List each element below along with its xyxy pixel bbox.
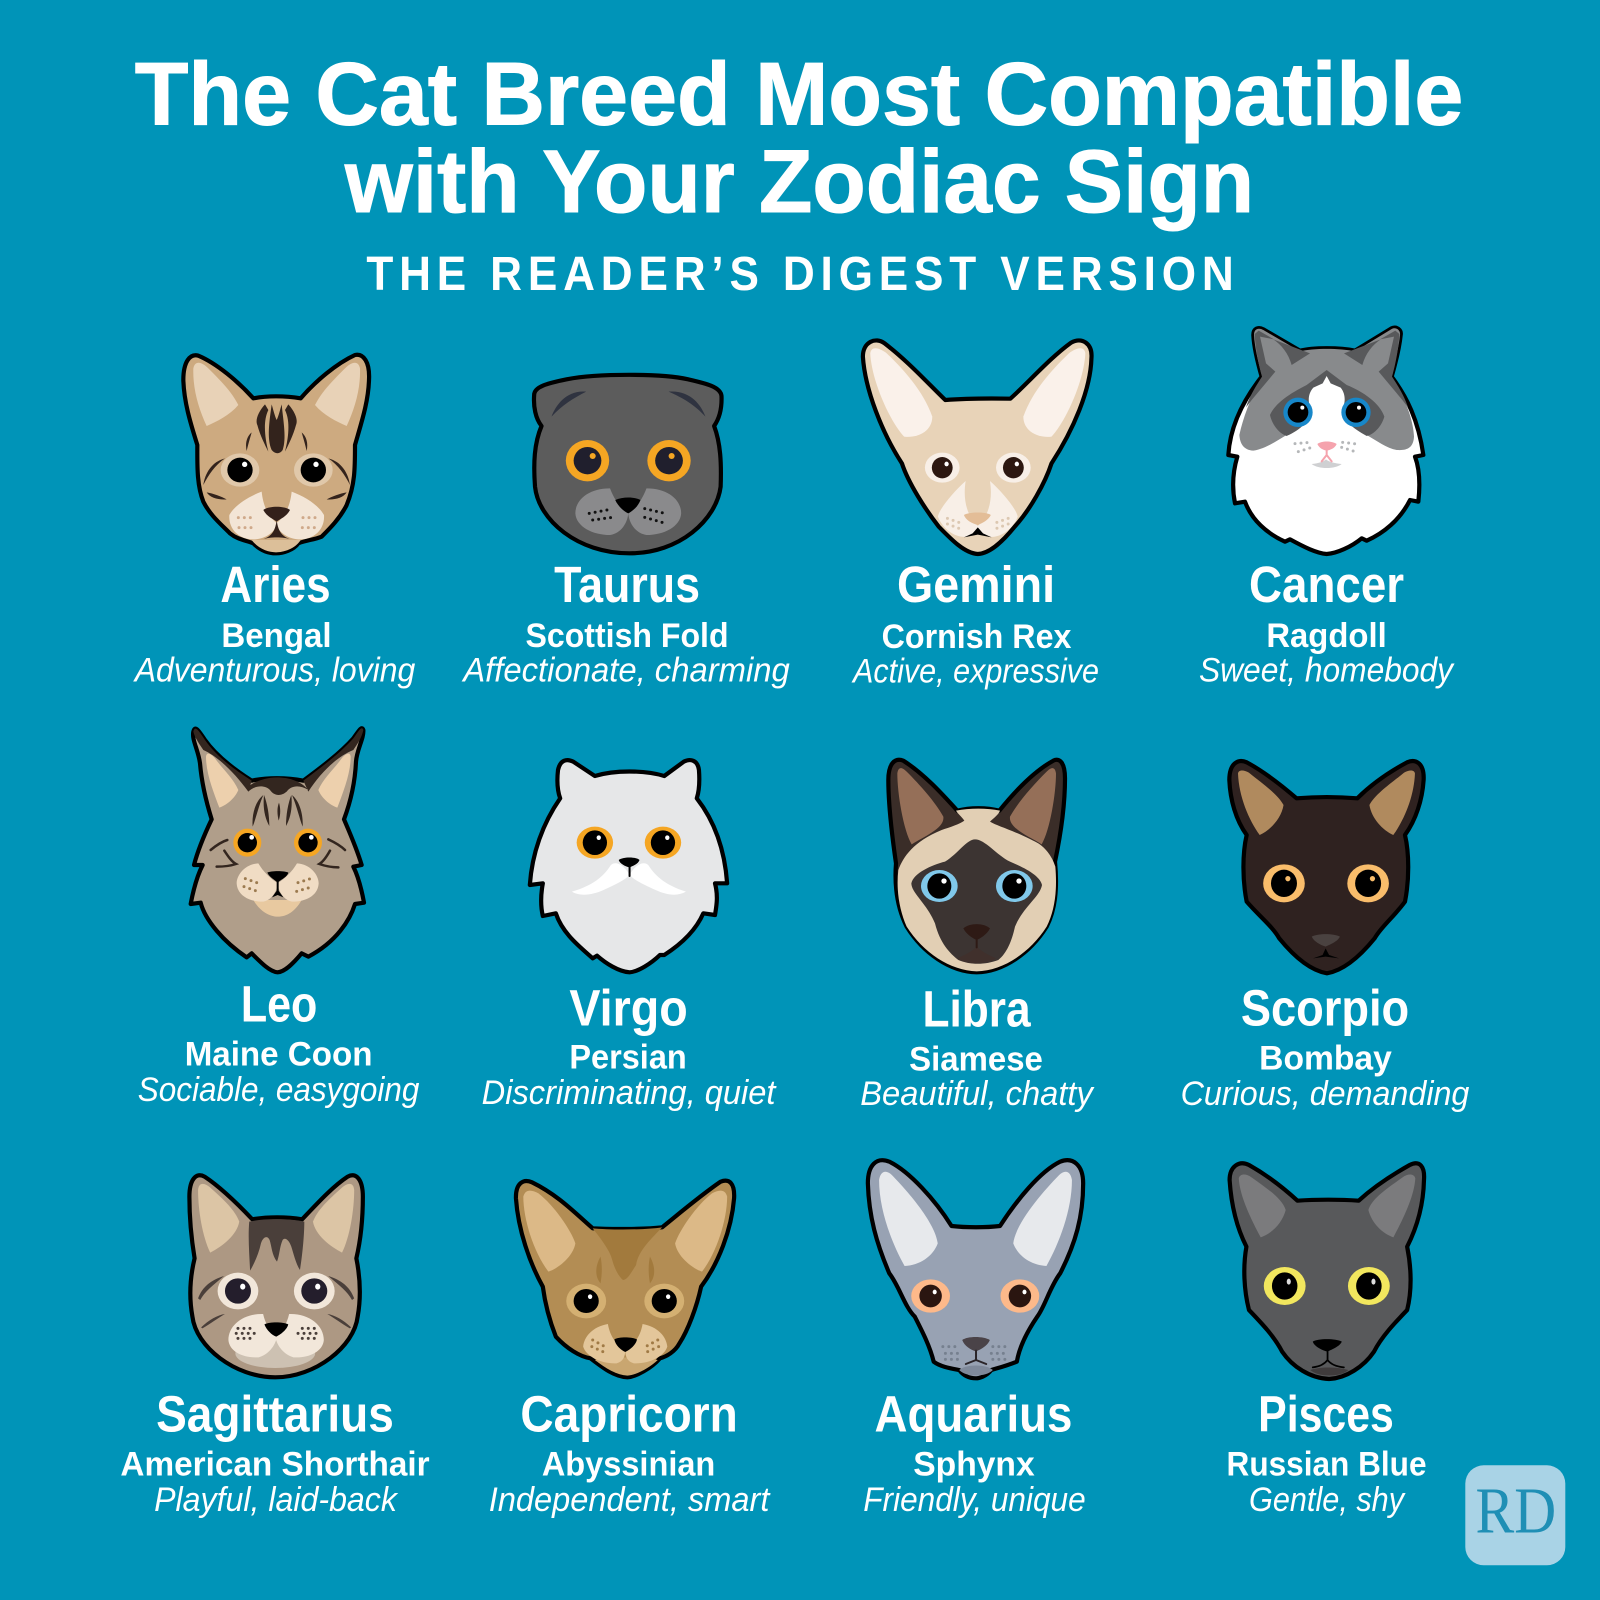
breed: Ragdoll	[1266, 617, 1387, 655]
card: Cancer	[1199, 328, 1455, 690]
sign name: Libra	[922, 981, 1031, 1038]
sign name: Taurus	[554, 556, 700, 613]
traits: Active, expressive	[851, 653, 1099, 691]
traits: Friendly, unique	[863, 1481, 1086, 1519]
icon: Cornish Rex cat	[863, 340, 1092, 554]
traits: Gentle, shy	[1249, 1481, 1406, 1519]
traits: Curious, demanding	[1181, 1075, 1469, 1113]
breed: Bengal	[221, 617, 332, 655]
icon: Russian Blue cat	[1230, 1163, 1424, 1379]
traits: Adventurous, loving	[133, 652, 415, 690]
traits: Playful, laid-back	[154, 1481, 398, 1519]
sign name: Capricorn	[520, 1386, 738, 1443]
card: Sagittarius	[120, 1175, 430, 1519]
icon: Maine Coon cat	[191, 728, 364, 972]
traits: Sweet, homebody	[1199, 652, 1455, 690]
breed: Scottish Fold	[526, 617, 729, 655]
breed: Maine Coon	[185, 1035, 372, 1073]
card: Aries	[133, 355, 415, 690]
logo: RD badge	[1465, 1465, 1565, 1565]
icon: Abyssinian cat	[516, 1181, 734, 1377]
icon: Bengal cat	[183, 355, 369, 553]
breed: Russian Blue	[1227, 1446, 1427, 1484]
sign name: Pisces	[1258, 1386, 1394, 1443]
traits: Discriminating, quiet	[482, 1074, 777, 1112]
icon: American Shorthair cat	[189, 1175, 363, 1377]
card: Libra	[860, 760, 1095, 1113]
card: Virgo	[482, 760, 777, 1112]
title: with Your Zodiac Sign	[344, 132, 1254, 231]
card: Aquarius	[863, 1160, 1086, 1519]
traits: Affectionate, charming	[461, 652, 790, 690]
icon: Persian cat	[530, 760, 727, 972]
breed: American Shorthair	[120, 1446, 430, 1484]
sign name: Cancer	[1249, 556, 1404, 613]
icon: Ragdoll cat	[1228, 328, 1423, 554]
card: Leo	[138, 728, 419, 1109]
sign name: Leo	[241, 975, 317, 1032]
title	[135, 44, 1463, 231]
sign name: Aries	[220, 556, 331, 613]
card: Gemini	[851, 340, 1099, 691]
logo: RD badge: RD	[1476, 1476, 1556, 1548]
breed: Persian	[569, 1038, 687, 1076]
traits: Sociable, easygoing	[138, 1071, 419, 1109]
card: Scorpio	[1181, 761, 1469, 1113]
breed: Bombay	[1259, 1039, 1393, 1077]
card: Capricorn	[489, 1181, 771, 1519]
title: The Cat Breed Most Compatible	[135, 44, 1463, 143]
sign name: Sagittarius	[156, 1386, 394, 1443]
sign name: Gemini	[897, 556, 1055, 613]
sign name: Aquarius	[874, 1386, 1072, 1443]
card: Taurus	[461, 375, 790, 690]
subtitle: THE READER’S DIGEST VERSION	[366, 246, 1234, 300]
breed: Cornish Rex	[882, 618, 1072, 656]
icon: Sphynx cat	[868, 1160, 1083, 1378]
breed: Siamese	[909, 1040, 1043, 1078]
icon: Scottish Fold cat	[534, 375, 722, 553]
breed: Abyssinian	[542, 1446, 715, 1484]
breed: Sphynx	[913, 1446, 1035, 1484]
traits: Independent, smart	[489, 1481, 771, 1519]
traits: Beautiful, chatty	[860, 1075, 1095, 1113]
card: Pisces	[1227, 1163, 1427, 1519]
icon: Bombay cat	[1229, 761, 1424, 973]
sign name: Scorpio	[1241, 980, 1409, 1037]
sign name: Virgo	[569, 980, 688, 1037]
icon: Siamese cat	[888, 760, 1065, 972]
